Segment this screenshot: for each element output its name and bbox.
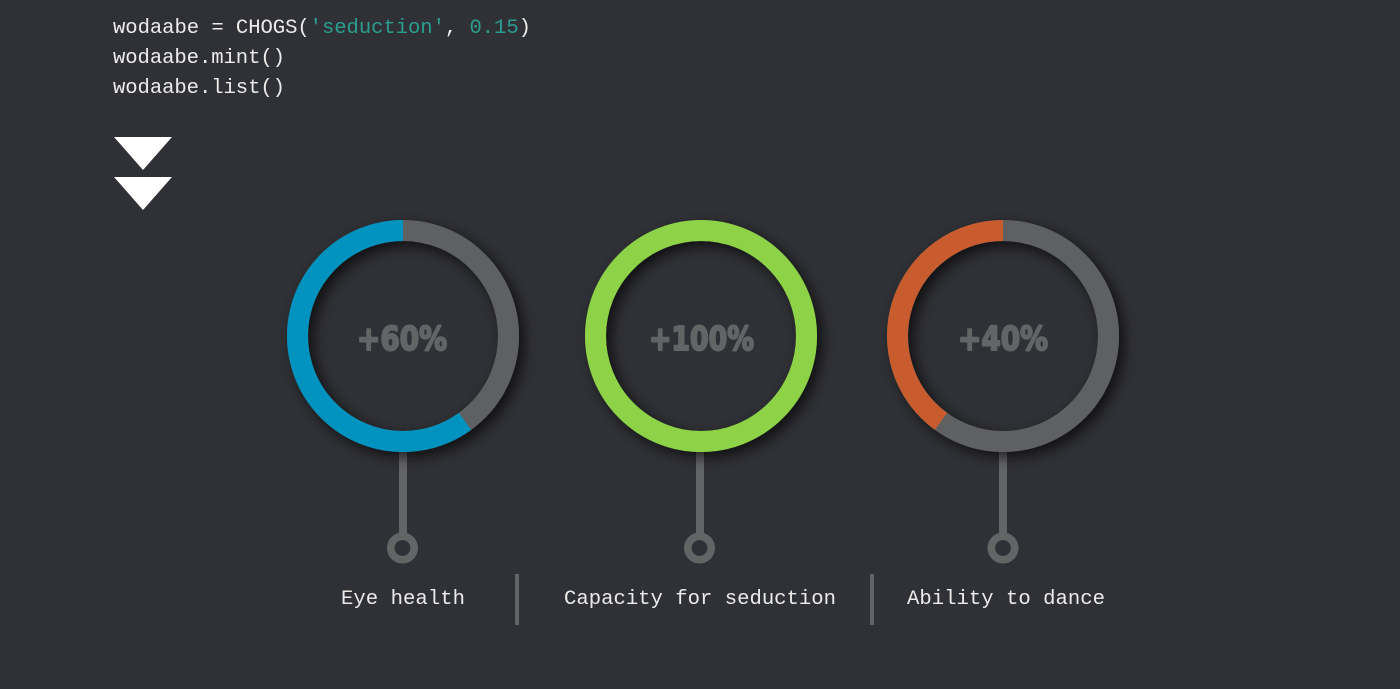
- divider left: [515, 574, 519, 625]
- code line 3: wodaabe.list(): [113, 77, 285, 100]
- gauge: capacity for seduction: [596, 230, 806, 560]
- connector node: [688, 536, 711, 560]
- percentage value: +60%: [357, 319, 447, 358]
- code line 1: wodaabe = CHOGS('seduction', 0.15): [113, 17, 531, 40]
- label: capacity for seduction: Capacity for seduction: [564, 588, 836, 611]
- connector node: [991, 536, 1015, 560]
- donut ring 100%: [596, 230, 806, 442]
- gauge: eye health: [297, 230, 508, 560]
- percentage value: +100%: [649, 319, 754, 358]
- label: ability to dance: Ability to dance: [907, 588, 1105, 611]
- icon: double down arrows: [114, 137, 172, 210]
- code line 2: wodaabe.mint(): [113, 47, 285, 70]
- connector stem: [399, 445, 407, 537]
- donut ring 60%: [297, 230, 508, 442]
- connector stem: [999, 445, 1007, 537]
- percentage value: +40%: [958, 319, 1048, 358]
- connector stem: [696, 445, 704, 537]
- label: eye health: Eye health: [341, 588, 465, 611]
- donut ring 40%: [898, 230, 1108, 442]
- gauge: ability to dance: [898, 230, 1108, 560]
- divider right: [870, 574, 874, 625]
- code block: [113, 17, 531, 100]
- connector node: [391, 536, 414, 560]
